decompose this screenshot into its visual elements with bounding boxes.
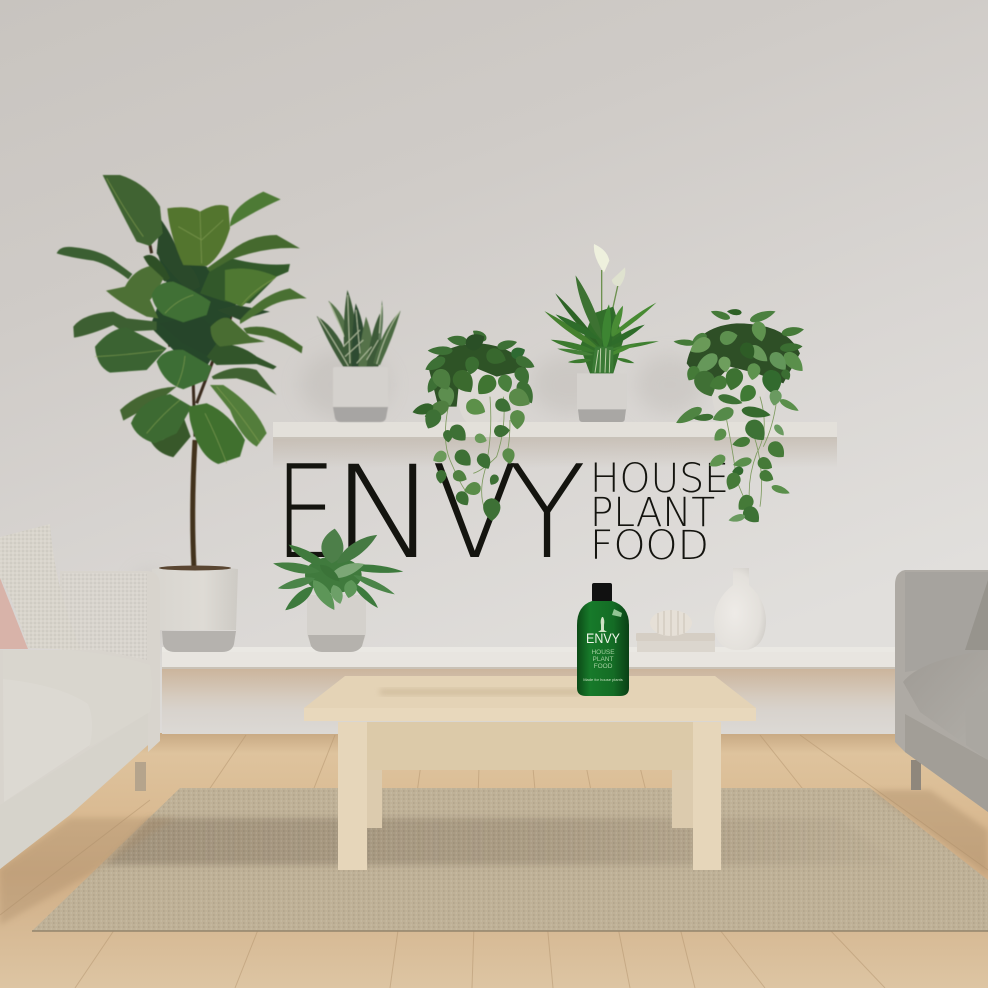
floor shadow — [870, 790, 988, 875]
front seat cushion — [3, 679, 92, 802]
label icon — [598, 617, 607, 632]
pothos plant in pot, upper shelf left — [411, 327, 538, 521]
foliage — [411, 327, 538, 521]
rear seat cushion — [903, 650, 988, 745]
label text: ENVY — [586, 630, 621, 646]
dark inner mass — [150, 250, 237, 383]
pothos plant in pot, upper shelf right — [673, 307, 808, 527]
white vase — [714, 568, 766, 650]
logo wordmark: ENVY: N — [331, 439, 438, 588]
coffee table — [304, 676, 756, 870]
pot — [577, 373, 627, 410]
small plant pot, lower shelf — [307, 595, 366, 652]
left sofa — [0, 524, 175, 925]
pot — [710, 363, 770, 422]
back leaves — [57, 218, 307, 421]
large floor pot — [152, 566, 238, 652]
upper shelf — [273, 422, 837, 439]
pot — [453, 370, 513, 422]
tabletop — [304, 676, 756, 708]
coffee table legs over rug — [338, 788, 721, 870]
floor — [0, 733, 988, 988]
floor shadow — [0, 818, 175, 925]
logo wordmark: ENVY — [275, 439, 586, 588]
front legs — [338, 722, 367, 870]
front seat cushion — [965, 690, 988, 760]
soft wall shadows behind plants — [128, 350, 705, 650]
fiddle leaf fig — [57, 175, 307, 568]
product bottle: HOUSE — [591, 649, 615, 656]
shadow under upper shelf — [273, 438, 837, 468]
books — [636, 633, 715, 652]
logo tagline: HOUSE PLANT FOOD: FOOD — [590, 523, 709, 569]
leaf veins — [95, 178, 275, 463]
lower shelf — [162, 647, 895, 669]
base — [905, 714, 988, 812]
front leaves — [95, 175, 281, 464]
product bottle: FOOD — [594, 663, 613, 670]
snake plant in pot — [317, 290, 401, 422]
wall background — [0, 0, 988, 740]
rear seat cushion — [3, 650, 152, 747]
tabletop shadow — [380, 689, 580, 695]
foliage — [673, 307, 808, 527]
logo wordmark: ENVY: E — [275, 439, 336, 588]
decorative shell — [650, 610, 692, 636]
small pot base band — [308, 635, 365, 652]
logo tagline: HOUSE PLANT FOOD — [590, 456, 729, 569]
leg — [911, 760, 921, 790]
highlight — [612, 609, 622, 617]
small leafy plant, lower shelf — [272, 528, 404, 614]
product bottle: Made for house plants — [583, 677, 623, 682]
sofa silhouette, back and arm — [895, 570, 988, 812]
sofa silhouette, back and arm — [0, 571, 160, 869]
apron — [365, 722, 695, 770]
cap — [592, 583, 612, 602]
logo tagline: HOUSE PLANT FOOD: HOUSE — [590, 456, 729, 502]
right sofa — [870, 570, 988, 875]
logo wordmark: ENVY: V — [431, 439, 519, 588]
pillow — [965, 580, 988, 650]
leaves — [543, 274, 659, 373]
trunk — [193, 440, 195, 568]
pink pillow — [0, 578, 28, 649]
wall panel under lower shelf — [162, 668, 895, 734]
jute rug — [32, 788, 988, 931]
product bottle — [577, 583, 629, 696]
logo tagline: HOUSE PLANT FOOD: PLANT — [590, 490, 715, 536]
peace lily in pot — [543, 244, 659, 422]
stems and flowers — [594, 244, 625, 327]
leg — [135, 762, 146, 791]
logo wordmark: ENVY: Y — [508, 439, 586, 588]
branches — [150, 245, 233, 437]
base — [0, 713, 148, 869]
body — [577, 601, 629, 696]
product bottle: PLANT — [593, 656, 614, 663]
back legs — [367, 760, 382, 828]
textured pillow — [0, 524, 81, 650]
